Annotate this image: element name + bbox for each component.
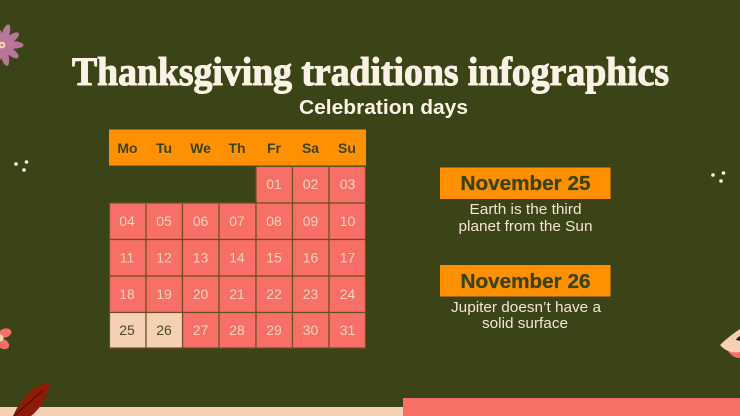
calendar row 4: 23 [303, 286, 318, 302]
calendar row 4: 22 [266, 286, 282, 302]
calendar row 3: 15 [266, 250, 282, 266]
date label November 26: November 26 [460, 271, 590, 293]
calendar row 2: 05 [156, 213, 172, 229]
calendar header: Fr [267, 140, 282, 156]
calendar row 4 [110, 276, 366, 312]
date label November 25: November 25 [460, 173, 590, 195]
calendar header: Tu [156, 140, 172, 156]
calendar header: Sa [302, 140, 319, 156]
icon: coral flower left edge [0, 327, 12, 351]
calendar row 5: 27 [193, 322, 208, 338]
calendar header: Su [338, 140, 356, 156]
calendar row 4: 19 [156, 286, 172, 302]
calendar row 5: 29 [266, 322, 282, 338]
description November 26 [451, 300, 602, 332]
calendar row 3: 11 [120, 250, 134, 266]
calendar row 3: 14 [229, 250, 245, 266]
calendar row 2: 08 [266, 213, 282, 229]
calendar row 4: 24 [340, 286, 355, 302]
calendar row 2: 04 [119, 213, 135, 229]
calendar header: Th [228, 140, 246, 156]
event: November 25 [440, 168, 610, 235]
calendar row 3: 12 [156, 250, 172, 266]
description November 25: Earth is the third [470, 202, 582, 218]
decorative dots right [711, 171, 725, 183]
calendar row 1: 03 [340, 176, 355, 192]
icon: red leaf bottom left [13, 382, 50, 416]
calendar row 2 [110, 203, 366, 240]
description November 26: solid surface [482, 316, 568, 332]
calendar header: Mo [117, 140, 138, 156]
calendar header [109, 130, 366, 166]
calendar row 4: 20 [193, 286, 208, 302]
date label November 25 [440, 168, 610, 199]
calendar row 5 [110, 312, 366, 348]
calendar row 3: 13 [193, 250, 208, 266]
description November 25 [458, 202, 592, 235]
calendar row 5: 30 [303, 322, 318, 338]
date label November 26 [440, 265, 610, 296]
event: November 26 [440, 265, 610, 332]
calendar row 1: 01 [266, 176, 282, 192]
decorative dots left [14, 160, 28, 172]
description November 26: Jupiter doesn’t have a [451, 300, 602, 316]
calendar row 5: 28 [229, 322, 245, 338]
calendar header: We [190, 140, 211, 156]
calendar row 4: 21 [229, 286, 245, 302]
calendar row 3: 17 [340, 250, 355, 266]
calendar row 2: 06 [193, 213, 208, 229]
calendar row 5: 26 [156, 322, 172, 338]
calendar row 1: 02 [303, 176, 318, 192]
calendar row 4: 18 [119, 286, 135, 302]
calendar [109, 130, 366, 348]
bottom strip: peach [0, 407, 404, 416]
title: Thanksgiving traditions infographics [72, 49, 669, 94]
calendar row 5: 25 [119, 322, 135, 338]
subtitle: Celebration days [299, 97, 468, 119]
calendar row 3: 16 [303, 250, 318, 266]
calendar row 3 [110, 240, 366, 276]
calendar row 1 [256, 166, 366, 203]
calendar row 2: 07 [229, 213, 245, 229]
calendar row 2: 10 [340, 213, 355, 229]
description November 25: planet from the Sun [458, 219, 592, 235]
calendar row 2: 09 [303, 213, 318, 229]
calendar row 5: 31 [340, 322, 355, 338]
bottom strip: coral [403, 398, 740, 416]
icon: peach bird shape right edge [720, 329, 740, 358]
icon: pink flower top left [0, 23, 24, 67]
